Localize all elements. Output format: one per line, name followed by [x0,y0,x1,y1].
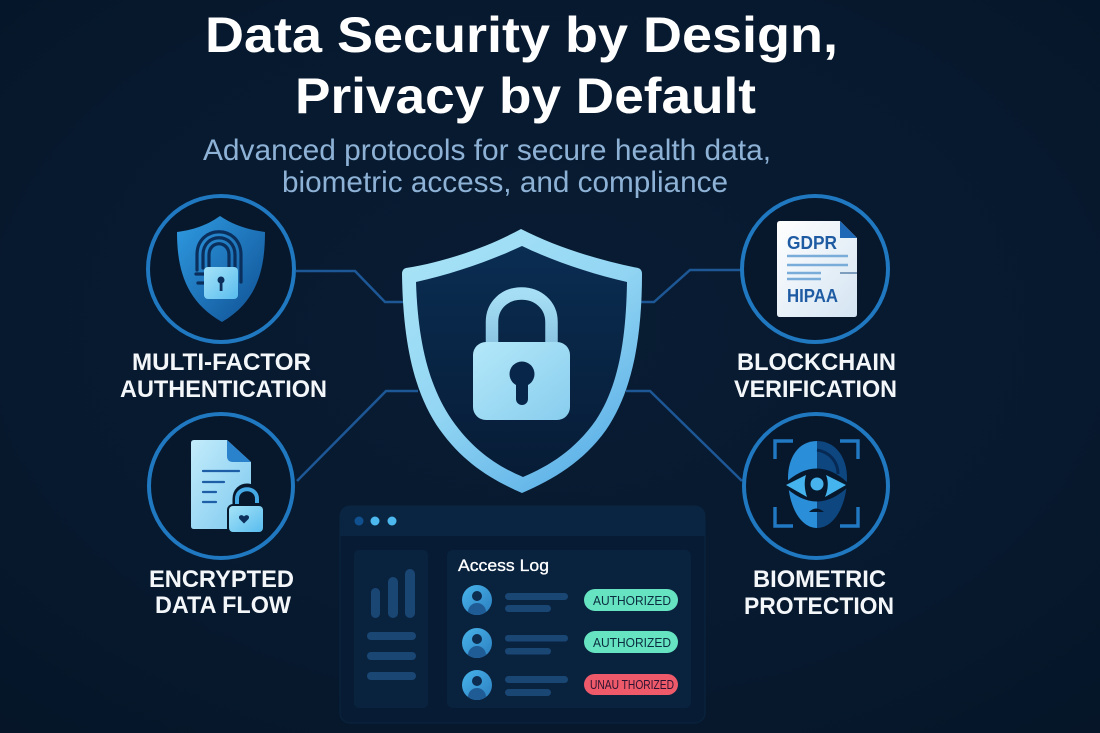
log row: authorized: AUTHORIZED [593,593,671,608]
access log panel [447,550,691,708]
log row: unauthorized: UNAU THORIZED [590,678,674,692]
access log heading: Access Log [458,557,549,575]
icon: document with lock [191,440,265,534]
icon ring [148,196,294,342]
subtitle: Advanced protocols for secure health data, [203,134,771,167]
label: MULTI-FACTOR [132,349,311,376]
icon: shield with fingerprint lock [177,216,265,322]
feature: biometric protection [744,414,894,620]
title: Privacy by Default [295,68,756,124]
dashboard window [340,506,705,723]
central shield [402,229,642,493]
sidebar panel [354,550,428,708]
label: BLOCKCHAIN [737,349,896,376]
label [120,349,327,403]
log row: authorized [462,628,678,658]
icon: face scan with eye [775,441,858,528]
label [149,566,294,619]
title: Data Security by Design, [205,7,838,63]
label: PROTECTION [744,593,894,620]
label [734,349,897,403]
icon ring [742,196,888,342]
connector lines [296,270,742,481]
subtitle [203,134,771,199]
log row: unauthorized [462,670,678,700]
icon: compliance document [777,221,857,317]
icon ring [149,414,293,558]
label: DATA FLOW [155,592,291,619]
icon ring [744,414,888,558]
window header [340,506,705,536]
icon: compliance document: HIPAA [787,286,838,306]
feature: encrypted data flow [149,414,294,619]
log row: authorized: AUTHORIZED [593,635,671,650]
label: VERIFICATION [734,376,897,403]
label: BIOMETRIC [753,566,886,593]
label: AUTHENTICATION [120,376,327,403]
padlock [473,294,570,420]
feature: blockchain verification [734,196,897,403]
log row: authorized [462,585,678,615]
subtitle: biometric access, and compliance [282,166,728,199]
label [744,566,894,620]
title [205,7,838,124]
feature: multi-factor authentication [120,196,327,403]
label: ENCRYPTED [149,566,294,593]
icon: compliance document: GDPR [787,233,837,253]
